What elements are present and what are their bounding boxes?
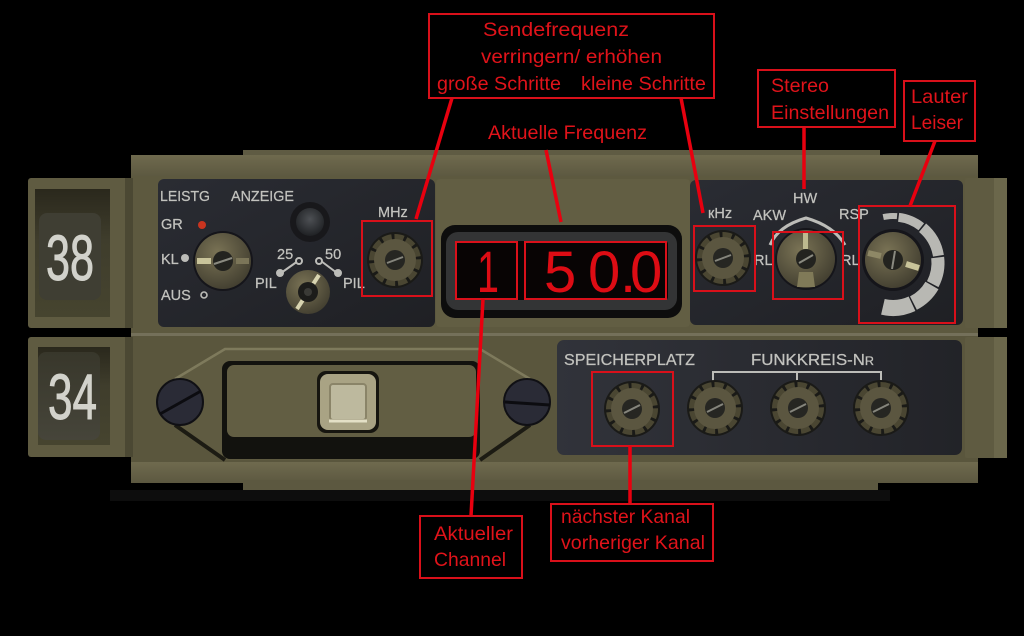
arrow: current frequency	[546, 150, 561, 222]
callout: Stereo Einstellungen: Stereo	[771, 75, 829, 97]
callout: Kanal: nächster Kanal	[561, 506, 690, 528]
panel: power and display controls	[158, 179, 435, 327]
label: PIL right: PIL	[343, 276, 365, 292]
callout: Sendefrequenz	[429, 14, 714, 98]
callout: Kanal: vorheriger Kanal	[561, 532, 705, 554]
pilot selector knob	[286, 270, 330, 314]
callout: Lauter Leiser	[904, 81, 975, 141]
callout: Stereo Einstellungen	[758, 70, 895, 127]
callout: Kanal	[551, 504, 713, 561]
label: 50: 50	[325, 247, 341, 263]
callout: Aktueller Channel: Aktueller	[434, 523, 514, 545]
frequency digits: 5	[544, 240, 576, 305]
channel tab 34: 34	[48, 361, 97, 433]
circuit knob 3	[853, 380, 909, 436]
callout: Sendefrequenz: Sendefrequenz	[483, 19, 629, 41]
selector connector lines	[277, 258, 341, 276]
callout: Lauter Leiser: Leiser	[911, 112, 963, 134]
indicator dots	[181, 221, 207, 298]
right side tabs	[965, 178, 1007, 458]
circuit knob 1	[687, 380, 743, 436]
label: ANZEIGE: ANZEIGE	[231, 189, 294, 205]
callout: Aktuelle Frequenz: Aktuelle Frequenz	[488, 122, 647, 144]
label: RSP: RSP	[839, 207, 869, 223]
channel tab 38	[28, 178, 133, 328]
frequency digits: .	[620, 240, 636, 305]
callout: Aktueller Channel	[420, 516, 522, 578]
stereo knob	[775, 228, 837, 290]
label: HW: HW	[793, 191, 817, 207]
power knob	[193, 231, 253, 291]
volume scale	[828, 198, 958, 328]
callout: Sendefrequenz: große Schritte	[437, 73, 561, 95]
bracket	[713, 372, 881, 382]
label: AKW: AKW	[753, 208, 786, 224]
label: 25: 25	[277, 247, 293, 263]
label: RL right: RL	[841, 253, 860, 269]
memory knob	[604, 381, 660, 437]
arrow: stereo settings	[802, 127, 806, 189]
label: SPEICHERPLATZ: SPEICHERPLATZ	[564, 352, 695, 369]
label: PIL left: PIL	[255, 276, 277, 292]
callout: Stereo Einstellungen: Einstellungen	[771, 102, 889, 124]
label: MHz: MHz	[378, 205, 408, 221]
red highlight boxes	[362, 206, 955, 446]
release button	[317, 371, 379, 433]
kHz knob	[695, 230, 751, 286]
callout: Aktueller Channel: Channel	[434, 549, 506, 571]
callout: Sendefrequenz: kleine Schritte	[581, 73, 706, 95]
frequency digits: 0	[588, 240, 620, 305]
right screw	[504, 379, 550, 425]
circuit knob 2	[770, 380, 826, 436]
label: GR: GR	[161, 217, 183, 233]
panel: tuning, stereo and volume controls	[690, 180, 963, 328]
label: LEISTG: LEISTG	[160, 189, 210, 205]
label: kHz: кHz	[708, 206, 732, 222]
label: KL: KL	[161, 252, 179, 268]
label: AUS: AUS	[161, 288, 191, 304]
stereo selector arc	[770, 218, 845, 245]
frequency digits: 0	[630, 240, 662, 305]
volume knob	[862, 229, 924, 291]
label: FUNKKREIS-Nr: FUNKKREIS-N R	[751, 352, 874, 369]
arrow: memory channel	[628, 446, 632, 504]
channel tab 34	[28, 337, 133, 457]
display button	[290, 202, 330, 242]
channel tab 38: 38	[46, 222, 94, 294]
label: RL left: RL	[754, 253, 773, 269]
arrow: current channel	[471, 299, 483, 516]
callout: Sendefrequenz: verringern/ erhöhen	[481, 46, 662, 68]
frequency display	[436, 179, 690, 327]
callout: Lauter Leiser: Lauter	[911, 86, 969, 108]
radio device body	[110, 150, 978, 501]
arrow: volume	[910, 141, 935, 206]
arrow: send frequency to kHz knob	[681, 98, 703, 213]
arrow: send frequency to MHz knob	[416, 98, 452, 219]
handle assembly	[157, 348, 550, 460]
MHz knob	[367, 232, 423, 288]
panel: memory and radio circuit	[557, 340, 962, 455]
left screw	[157, 379, 203, 425]
channel digit: 1	[477, 240, 499, 305]
